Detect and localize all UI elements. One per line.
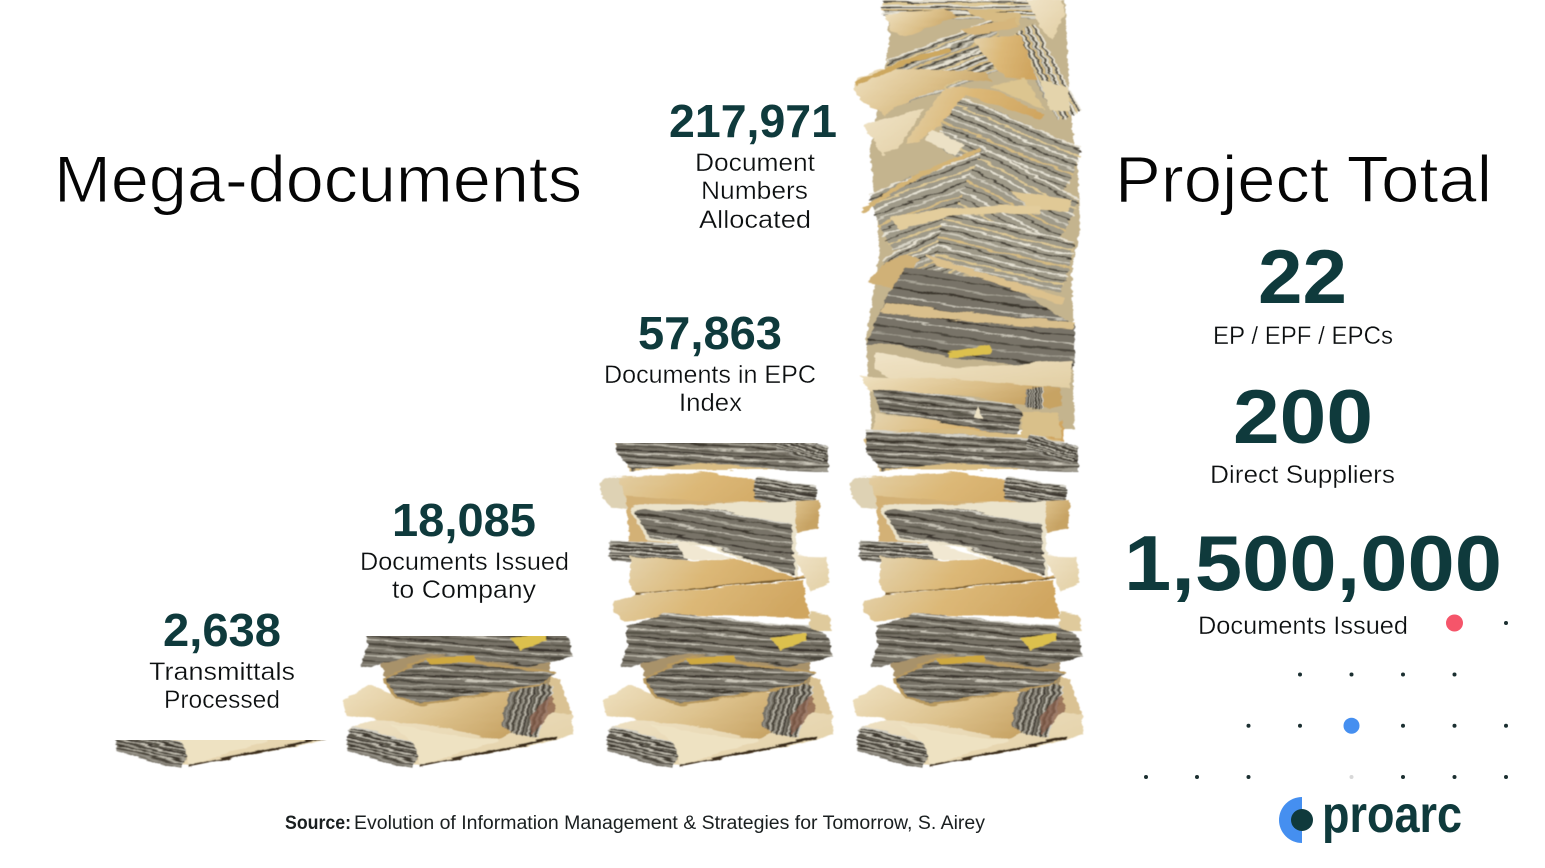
heading: Project Total: Project Total bbox=[1115, 142, 1492, 216]
number: 1,500,000 bbox=[1124, 519, 1502, 607]
number: 22 bbox=[1258, 235, 1347, 320]
icon: logo mark bbox=[1279, 797, 1313, 843]
number: 57,863 bbox=[638, 307, 782, 359]
stat: 57,863 documents in EPC index bbox=[604, 307, 816, 417]
stat: 2,638 transmittals bbox=[149, 604, 295, 714]
stat: 1,500,000 documents issued bbox=[1124, 519, 1502, 640]
stat: 217,971 document numbers bbox=[669, 95, 837, 234]
stat: 217,971 document numbers: Allocated bbox=[699, 206, 811, 234]
number: 2,638 bbox=[163, 604, 281, 656]
logo: proarc bbox=[1279, 786, 1462, 844]
source line: Evolution of Information Management & Strategies for Tomorrow, S. Airey bbox=[354, 813, 986, 834]
title: Mega-documents: Mega-documents bbox=[54, 142, 582, 216]
stat: 18,085 documents issued: to Company bbox=[392, 576, 537, 604]
logo wordmark: proarc bbox=[1322, 786, 1462, 844]
paper stack: third column bbox=[599, 443, 834, 768]
paper stack: first column bbox=[114, 740, 326, 768]
stat: 2,638 transmittals: Processed bbox=[164, 686, 280, 714]
label: Documents Issued bbox=[1198, 612, 1408, 640]
label: Transmittals bbox=[149, 658, 295, 686]
stat: 57,863 documents in EPC index: Index bbox=[679, 389, 742, 417]
label: Document bbox=[695, 149, 815, 177]
stat: 22 EP / EPF / EPCs bbox=[1213, 235, 1393, 350]
paper stack: second column bbox=[342, 636, 574, 768]
number: 18,085 bbox=[392, 494, 536, 546]
number: 217,971 bbox=[669, 95, 837, 147]
number: 200 bbox=[1233, 375, 1373, 460]
label: Documents Issued bbox=[360, 548, 569, 576]
dot grid decoration bbox=[1144, 614, 1508, 779]
label: Documents in EPC bbox=[604, 361, 816, 389]
label: EP / EPF / EPCs bbox=[1213, 322, 1393, 350]
stat: 200 direct suppliers bbox=[1210, 375, 1395, 489]
stat: 217,971 document numbers: Numbers bbox=[701, 177, 808, 205]
source line: Source: bbox=[285, 813, 351, 834]
paper stack: fourth column bbox=[843, 0, 1086, 770]
stat: 18,085 documents issued bbox=[360, 494, 569, 604]
label: Direct Suppliers bbox=[1210, 461, 1395, 489]
